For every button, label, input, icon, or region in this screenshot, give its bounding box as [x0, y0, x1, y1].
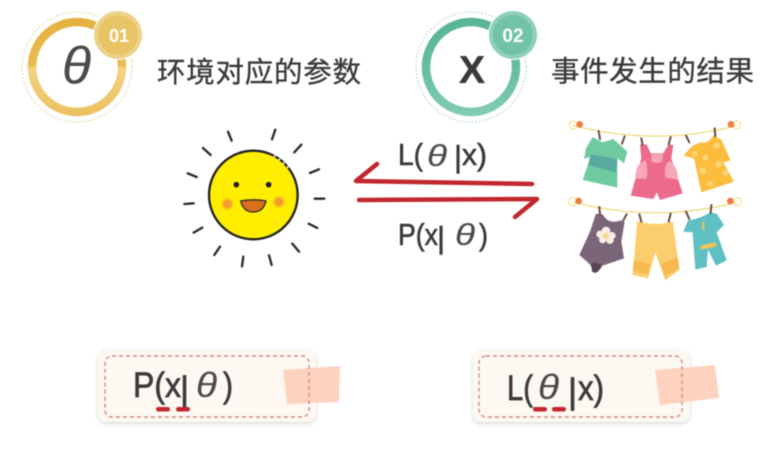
badge: theta parameter: [22, 10, 143, 122]
label: P(x|theta): |: [437, 220, 445, 255]
label: P(x|theta): P(x: [398, 217, 438, 252]
note card: P(x|theta): |: [180, 370, 189, 409]
heading: environment parameter: 环境对应的参数: [157, 57, 361, 89]
bodysuit: purple: [579, 207, 627, 273]
note card: P(x|theta): P(x: [133, 366, 181, 405]
note card: L(theta|x): L(: [507, 369, 533, 408]
note card: P(x|theta): ): [223, 366, 233, 405]
arrow: probability, left to right: [359, 199, 537, 217]
badge: X result: 02: [502, 26, 524, 47]
badge: theta parameter: 01: [109, 26, 129, 46]
note card: P(x|theta): θ: [196, 366, 217, 405]
shirt: green: [583, 131, 627, 188]
label: L(theta|x): L(: [398, 137, 424, 172]
tape: right card: [655, 365, 719, 405]
label: L(theta|x): x): [462, 137, 487, 172]
label: L(theta|x): |: [454, 139, 462, 174]
clothesline: top: [569, 121, 741, 136]
note card: L(theta|x): [473, 350, 719, 422]
clothesline: bottom: [569, 198, 741, 213]
badge: theta parameter: θ: [62, 37, 91, 95]
heading: event outcome: 事件发生的结果: [551, 56, 754, 88]
note card: L(theta|x): x): [578, 369, 604, 408]
label: L(theta|x): θ: [427, 138, 447, 173]
label: L(theta|x): [398, 137, 487, 174]
tape: left card: [283, 366, 340, 404]
arrow: likelihood, right to left: [356, 164, 532, 184]
label: P(x|theta): [398, 217, 488, 255]
badge: X result: [416, 10, 538, 122]
label: P(x|theta): ): [479, 217, 488, 252]
illustration: baby clothes on lines: [569, 121, 741, 280]
badge: X result: X: [459, 49, 485, 92]
note card: L(theta|x): θ: [538, 368, 559, 407]
label: P(x|theta): θ: [455, 217, 475, 252]
note card: P(x|theta): [98, 350, 340, 422]
trousers: yellow: [633, 214, 679, 280]
shirt: yellow: [683, 128, 734, 192]
note card: L(theta|x): |: [568, 372, 577, 411]
icon: smiling sun: [184, 130, 324, 266]
overalls: pink: [631, 137, 683, 200]
romper: teal: [683, 205, 727, 270]
